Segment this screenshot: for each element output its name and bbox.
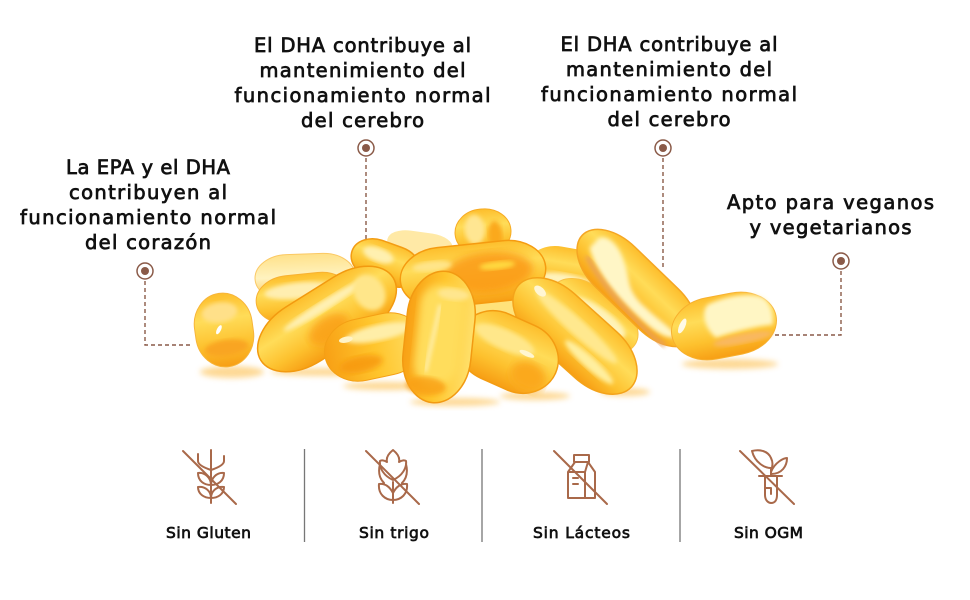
capsule: behind right lower	[539, 266, 649, 366]
divider	[304, 449, 306, 542]
text: brain function label, right	[541, 33, 797, 131]
capsule: back pale	[386, 228, 454, 260]
text: vegan label: y vegetarianos	[750, 216, 912, 239]
capsule: lone right	[666, 285, 782, 367]
capsule: back left	[254, 269, 354, 327]
text: heart function label: del corazón	[85, 231, 211, 254]
capsule: front right diagonal	[498, 262, 652, 410]
connector: right	[772, 271, 841, 335]
text: brain function label, left: El DHA contribuye al	[254, 34, 471, 57]
capsule: top	[453, 207, 513, 257]
divider	[481, 449, 483, 542]
text: brain function label, right: El DHA contribuye al	[560, 33, 778, 56]
callout marker: centre right	[655, 140, 671, 156]
text: brain function label, right: funcionamiento normal	[541, 83, 797, 106]
capsule: front left diagonal	[244, 251, 410, 387]
label: Sin trigo: Sin trigo	[359, 524, 429, 542]
text: heart function label: funcionamiento normal	[20, 206, 276, 229]
text: brain function label, left	[234, 34, 490, 132]
text: brain function label, left: mantenimiento del	[260, 59, 466, 82]
text: brain function label, left: funcionamiento normal	[234, 84, 490, 107]
icon: no dairy	[554, 451, 607, 504]
text: brain function label, right: mantenimiento del	[566, 58, 772, 81]
capsule: far left small	[190, 289, 258, 371]
capsule: tall right pale	[563, 215, 711, 361]
connector: left	[145, 281, 193, 345]
text: heart function label: contribuyen al	[69, 181, 227, 204]
capsule: front centre upright	[398, 268, 480, 406]
capsule: upper centre small	[345, 232, 427, 294]
capsule shadows	[200, 359, 778, 406]
icon: no gluten	[183, 450, 236, 504]
text: brain function label, left: del cerebro	[301, 109, 424, 132]
text: heart function label: La EPA y el DHA	[66, 156, 231, 179]
callout marker: centre left	[358, 140, 374, 156]
icon: no GMO	[740, 450, 794, 504]
capsule: centre deep orange	[397, 237, 549, 311]
divider	[679, 449, 681, 542]
connector: centre right	[662, 158, 664, 270]
callout marker: right	[833, 253, 849, 269]
label: Sin Lácteos: Sin Lácteos	[533, 524, 630, 542]
label: Sin OGM: Sin OGM	[734, 524, 803, 542]
capsule: front lower left	[319, 306, 429, 388]
softgel capsule pile	[190, 207, 782, 410]
capsule: back left pale	[254, 252, 356, 302]
callout marker: left	[137, 263, 153, 279]
icon: no wheat	[366, 450, 419, 504]
text: vegan label	[727, 191, 934, 239]
text: brain function label, right: del cerebro	[608, 108, 730, 131]
connector: centre left	[365, 158, 367, 242]
capsule: behind right	[525, 241, 611, 299]
text: vegan label: Apto para veganos	[727, 191, 934, 214]
text: heart function label	[20, 156, 276, 254]
label: Sin Gluten: Sin Gluten	[166, 524, 251, 542]
capsule: front centre right	[446, 299, 570, 405]
capsule: centre backing fill	[440, 290, 540, 340]
